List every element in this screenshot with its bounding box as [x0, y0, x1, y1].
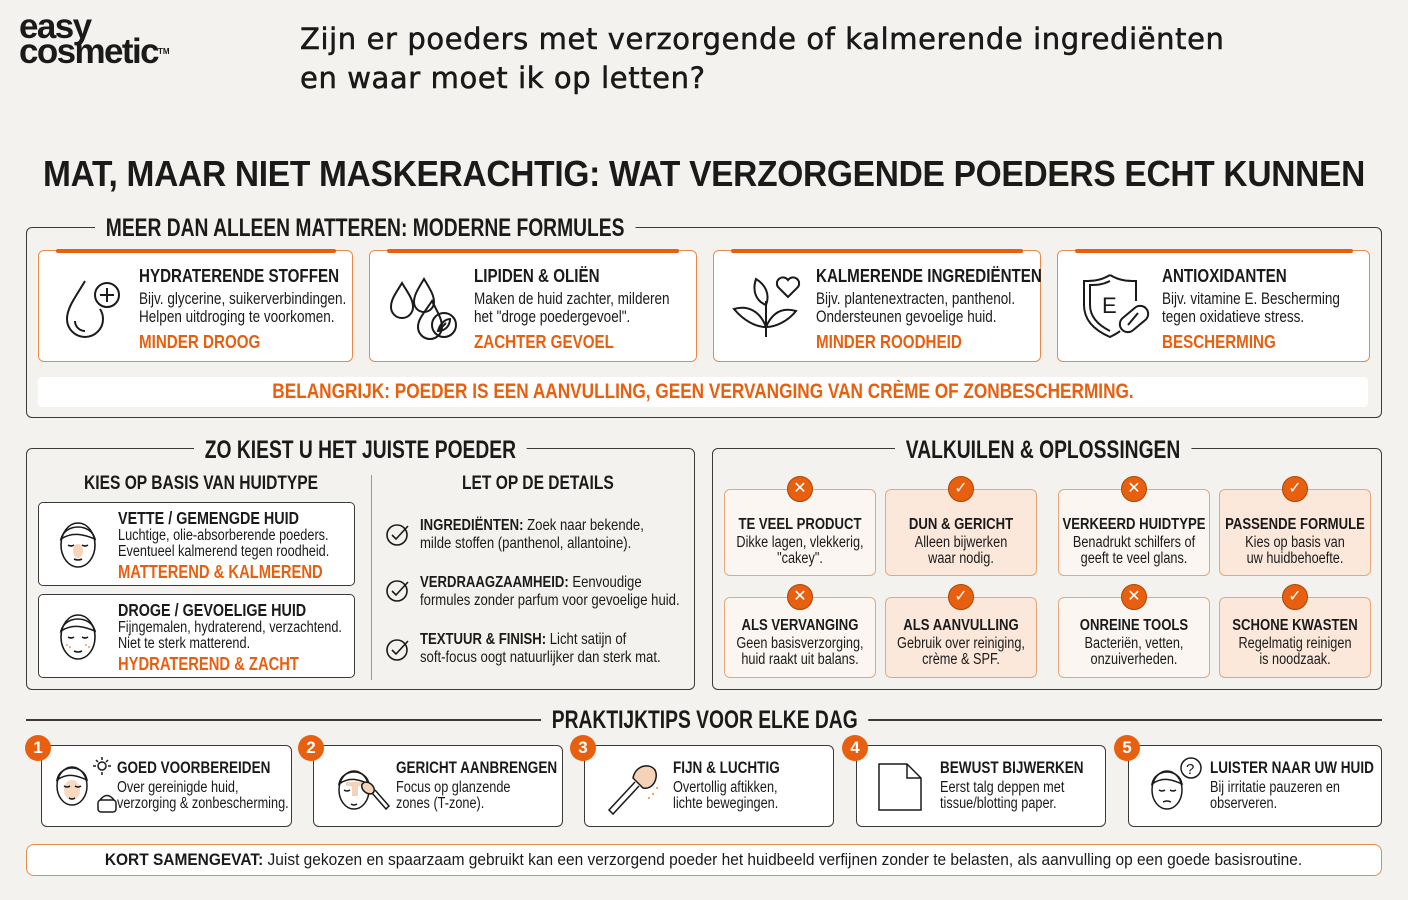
card: dun & gericht	[885, 489, 1037, 576]
card: droge huid: HYDRATEREND & ZACHT	[118, 654, 299, 674]
card: passende formule	[1219, 489, 1371, 576]
tip 4	[856, 745, 1106, 827]
card: antioxidanten: ANTIOXIDANTEN	[1162, 265, 1287, 286]
list: details	[386, 516, 680, 666]
card: antioxidanten: tegen oxidatieve stress.	[1162, 308, 1304, 326]
tip 2: zones (T-zone).	[396, 795, 484, 812]
card: onreine tools	[1058, 597, 1210, 678]
card: kalmerende ingrediënten: Bijv. plantenextracten, panthenol.	[816, 290, 1015, 308]
card: te veel product: Dikke lagen, vlekkerig,	[736, 534, 864, 551]
tip 3: Overtollig aftikken,	[673, 779, 778, 796]
subheading: huidtype: KIES OP BASIS VAN HUIDTYPE	[84, 473, 318, 494]
card: antioxidanten: Bijv. vitamine E. Bescherming	[1162, 290, 1340, 308]
card: als vervanging: Geen basisverzorging,	[736, 635, 864, 652]
card: antioxidanten: BESCHERMING	[1162, 331, 1276, 352]
tip 2: Focus op glanzende	[396, 779, 510, 796]
card: droge huid	[38, 594, 355, 678]
card: kalmerende ingrediënten: Ondersteunen gevoelige huid.	[816, 308, 997, 326]
card: dun & gericht: Alleen bijwerken	[915, 534, 1007, 551]
number badges: 3	[578, 738, 588, 757]
card: dun & gericht: waar nodig.	[928, 550, 994, 567]
list: details: formules zonder parfum voor gevoelige huid.	[420, 592, 680, 609]
tip 1: verzorging & zonbescherming.	[117, 795, 289, 812]
card: vette huid: MATTEREND & KALMEREND	[118, 562, 323, 582]
card: kalmerende ingrediënten: KALMERENDE INGREDIËNTEN	[816, 265, 1042, 286]
tip 3	[584, 745, 834, 827]
card: vette huid: Luchtige, olie-absorberende poeders.	[118, 527, 329, 544]
card: antioxidanten	[1057, 250, 1370, 362]
tip 1: GOED VOORBEREIDEN	[117, 759, 270, 777]
card: dun & gericht: DUN & GERICHT	[909, 516, 1013, 533]
icon: shield capsule: E	[1102, 293, 1117, 318]
card: droge huid: Niet te sterk matterend.	[118, 635, 250, 652]
card: onreine tools: onzuiverheden.	[1091, 651, 1177, 668]
icon: face brush	[338, 770, 390, 810]
heading: juiste poeder: ZO KIEST U HET JUISTE POEDER	[205, 436, 516, 464]
icon: drop plus	[66, 280, 120, 338]
question title	[300, 22, 1225, 95]
list: details: VERDRAAGZAAMHEID: Eenvoudige	[420, 574, 642, 591]
card: hydraterende stoffen	[38, 250, 353, 362]
card: schone kwasten: SCHONE KWASTEN	[1232, 617, 1358, 634]
card: als vervanging	[724, 597, 876, 678]
number badges: 5	[1122, 738, 1132, 757]
card: onreine tools: ONREINE TOOLS	[1080, 617, 1188, 634]
main title: MAT, MAAR NIET MASKERACHTIG: WAT VERZORGENDE POEDERS ECHT KUNNEN	[43, 153, 1365, 194]
card: droge huid: Fijngemalen, hydraterend, verzachtend.	[118, 619, 342, 636]
list: details: TEXTUUR & FINISH: Licht satijn of	[420, 631, 626, 648]
card: als aanvulling: Gebruik over reiniging,	[897, 635, 1025, 652]
icons: x / check markers: ✕	[1127, 586, 1141, 605]
tip 1: Over gereinigde huid,	[117, 779, 239, 796]
tip 4: BEWUST BIJWERKEN	[940, 759, 1084, 777]
list: details: soft-focus oogt natuurlijker dan sterk mat.	[420, 649, 661, 666]
icon: plant heart	[732, 276, 800, 337]
card: passende formule: uw huidbehoefte.	[1247, 550, 1343, 567]
question title: Zijn er poeders met verzorgende of kalmerende ingrediënten	[300, 22, 1225, 56]
summary bar	[26, 844, 1382, 876]
tip 1	[41, 745, 292, 827]
tip 3: lichte bewegingen.	[673, 795, 778, 812]
card: als aanvulling: crème & SPF.	[922, 651, 1000, 668]
subheading: details: LET OP DE DETAILS	[462, 473, 614, 494]
card: lipiden: LIPIDEN & OLIËN	[474, 265, 600, 286]
card: lipiden: het "droge poedergevoel".	[474, 308, 630, 326]
panel: juiste poeder	[26, 448, 695, 690]
tip 2: GERICHT AANBRENGEN	[396, 759, 557, 777]
card: vette huid: Eventueel kalmerend tegen roodheid.	[118, 543, 329, 560]
tip 4: tissue/blotting paper.	[940, 795, 1057, 812]
icons: x / check markers: ✓	[954, 478, 968, 497]
card: hydraterende stoffen: HYDRATERENDE STOFFEN	[139, 265, 339, 286]
card: als aanvulling	[885, 597, 1037, 678]
number badges: 4	[850, 738, 860, 757]
tip 5: Bij irritatie pauzeren en	[1210, 779, 1340, 796]
list: details: milde stoffen (panthenol, allantoine).	[420, 535, 631, 552]
tip 5	[1128, 745, 1382, 827]
card: schone kwasten: Regelmatig reinigen	[1238, 635, 1352, 652]
summary bar: KORT SAMENGEVAT: Juist gekozen en spaarzaam gebruikt kan een verzorgend poeder het huidbeeld verfijnen zonder te belasten, als aanvulling op een goede basisroutine.	[105, 850, 1302, 869]
card: schone kwasten	[1219, 597, 1371, 678]
icon: face dry	[60, 614, 96, 660]
icon: face question: ?	[1186, 761, 1194, 778]
card: hydraterende stoffen: Helpen uitdroging te voorkomen.	[139, 308, 335, 326]
icons: x / check markers: ✓	[954, 586, 968, 605]
icon: face	[60, 522, 96, 568]
card: schone kwasten: is noodzaak.	[1259, 651, 1331, 668]
card: onreine tools: Bacteriën, vetten,	[1085, 635, 1183, 652]
icons: x / check markers: ✓	[1288, 586, 1302, 605]
card: als vervanging: huid raakt uit balans.	[741, 651, 859, 668]
tip 3: FIJN & LUCHTIG	[673, 759, 780, 777]
card: hydraterende stoffen: Bijv. glycerine, suikerverbindingen.	[139, 290, 346, 308]
number badges: 1	[33, 738, 43, 757]
icon: blotting paper	[878, 763, 922, 811]
tip 4: Eerst talg deppen met	[940, 779, 1064, 796]
card: vette huid	[38, 502, 355, 586]
banner: belangrijk: BELANGRIJK: POEDER IS EEN AANVULLING, GEEN VERVANGING VAN CRÈME OF ZONBESCHERMING.	[272, 380, 1134, 403]
panel: moderne formules	[26, 227, 1382, 418]
icon: face sun cream	[56, 757, 117, 813]
panel: valkuilen	[712, 448, 1382, 690]
card: hydraterende stoffen: MINDER DROOG	[139, 331, 260, 352]
card: lipiden	[369, 250, 697, 362]
card: lipiden: Maken de huid zachter, milderen	[474, 290, 670, 308]
card: passende formule: PASSENDE FORMULE	[1225, 516, 1365, 533]
card: verkeerd huidtype	[1058, 489, 1210, 576]
card: kalmerende ingrediënten	[713, 250, 1041, 362]
card: als aanvulling: ALS AANVULLING	[903, 617, 1019, 634]
question title: en waar moet ik op letten?	[300, 61, 706, 95]
icon: face question	[1150, 757, 1202, 810]
card: lipiden: ZACHTER GEVOEL	[474, 331, 614, 352]
card: te veel product: "cakey".	[777, 550, 823, 567]
list: details: INGREDIËNTEN: Zoek naar bekende,	[420, 517, 644, 534]
heading: praktijktips: PRAKTIJKTIPS VOOR ELKE DAG	[552, 706, 858, 734]
icons: x / check markers: ✕	[793, 478, 807, 497]
card: verkeerd huidtype: VERKEERD HUIDTYPE	[1063, 516, 1205, 533]
tip 5: observeren.	[1210, 795, 1277, 812]
icon: shield capsule	[1083, 274, 1150, 338]
banner: belangrijk	[38, 377, 1368, 407]
card: als vervanging: ALS VERVANGING	[742, 617, 858, 634]
card: te veel product	[724, 489, 876, 576]
card: te veel product: TE VEEL PRODUCT	[739, 516, 861, 533]
tip 2	[313, 745, 563, 827]
card: verkeerd huidtype: geeft te veel glans.	[1081, 550, 1187, 567]
card: kalmerende ingrediënten: MINDER ROODHEID	[816, 331, 962, 352]
card: verkeerd huidtype: Benadrukt schilfers of	[1073, 534, 1195, 551]
logo	[19, 7, 170, 71]
card: vette huid: VETTE / GEMENGDE HUID	[118, 508, 299, 528]
number badges	[25, 735, 1140, 761]
heading: moderne formules: MEER DAN ALLEEN MATTEREN: MODERNE FORMULES	[106, 214, 624, 242]
icons: x / check markers	[787, 476, 1308, 610]
tip 5: LUISTER NAAR UW HUID	[1210, 759, 1374, 777]
card: droge huid: DROGE / GEVOELIGE HUID	[118, 600, 306, 620]
logo: easy	[19, 7, 90, 46]
icons: x / check markers: ✓	[1288, 478, 1302, 497]
icon: oil drops	[390, 277, 457, 340]
card: passende formule: Kies op basis van	[1245, 534, 1345, 551]
icons: x / check markers: ✕	[1127, 478, 1141, 497]
icon: brush	[608, 765, 658, 816]
icons: x / check markers: ✕	[793, 586, 807, 605]
logo: cosmeticTM	[19, 32, 170, 71]
heading: valkuilen: VALKUILEN & OPLOSSINGEN	[906, 436, 1180, 464]
number badges: 2	[306, 738, 316, 757]
